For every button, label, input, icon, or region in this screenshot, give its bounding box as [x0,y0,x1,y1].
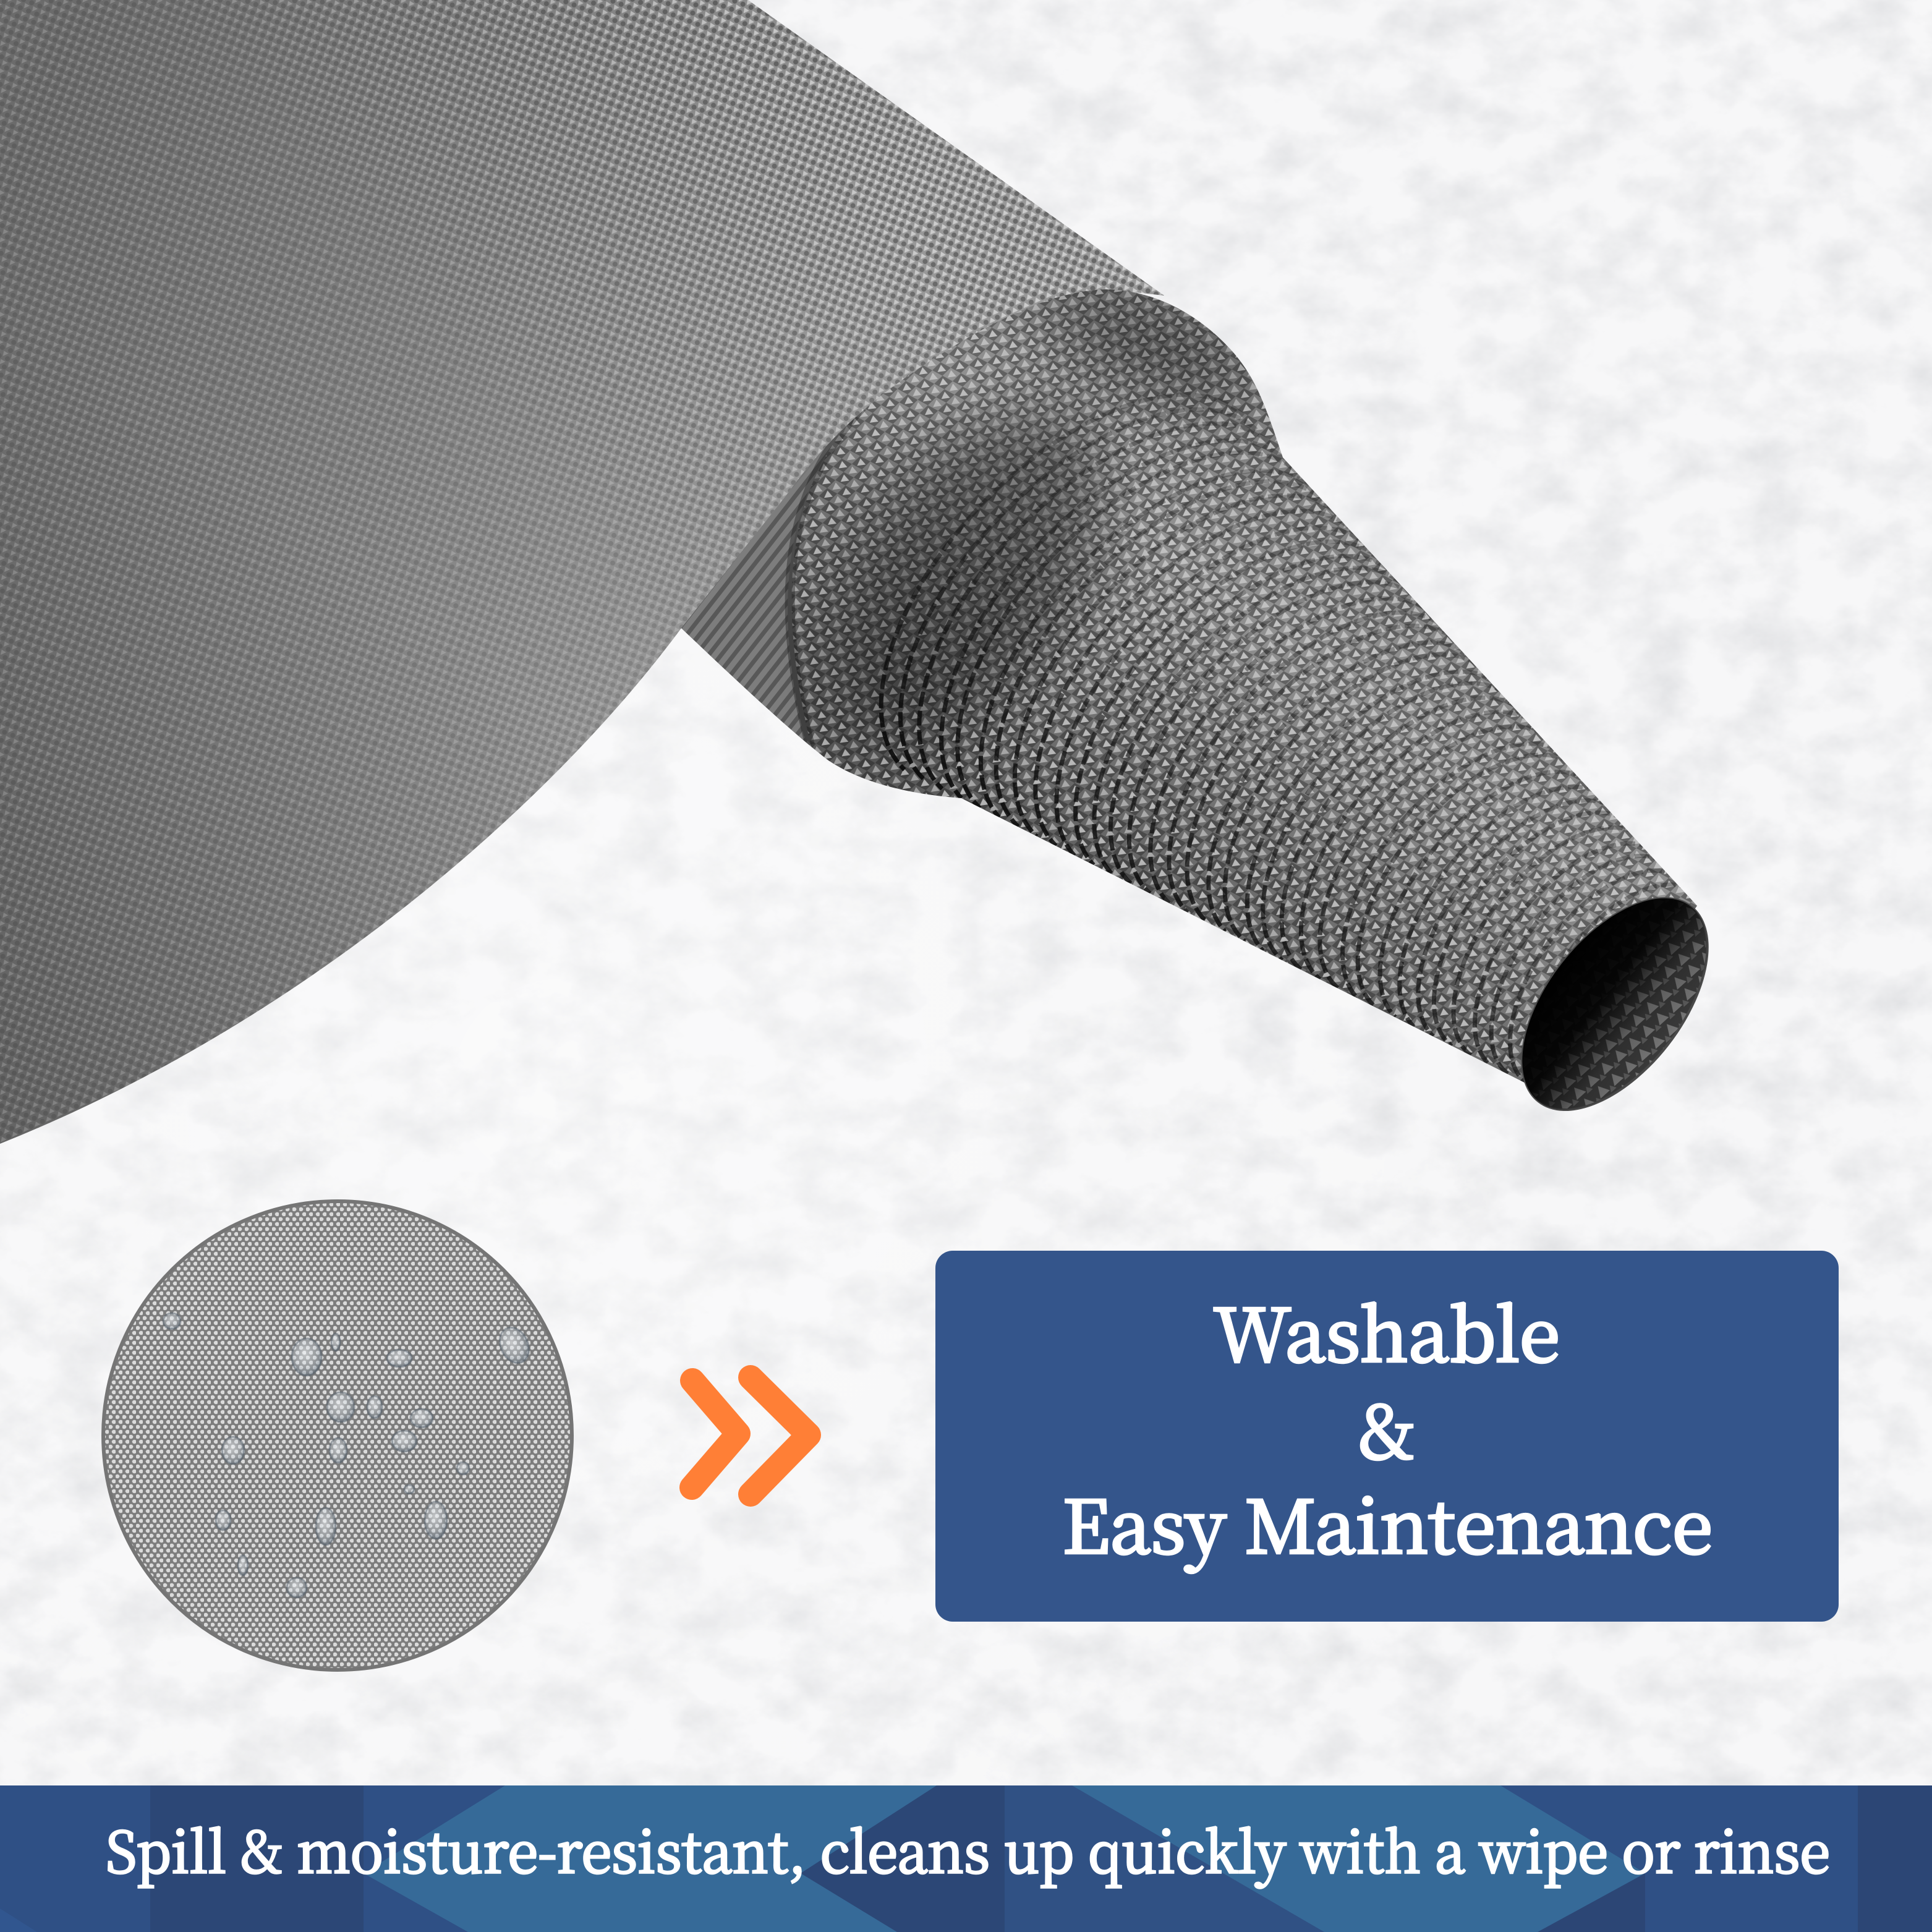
rolled end of mat [681,289,1697,1083]
banner geometric background [0,1785,1932,1932]
roll opening [1486,866,1743,1143]
fold strip [681,446,832,749]
mat sheet [0,0,1164,1144]
callout heading: & [1358,1374,1415,1479]
arrow: orange double chevron [692,1377,809,1494]
callout heading: Easy Maintenance [1062,1469,1713,1574]
callout heading [1062,1277,1713,1574]
coil rings [881,394,1693,1094]
icon: water droplets [163,1313,535,1598]
diamond weave [792,272,1793,1175]
panel: rolled grey mat product [0,0,1793,1175]
callout heading: Washable [1214,1277,1560,1382]
banner text: Spill & moisture-resistant, cleans up quickly with a wipe or rinse [106,1808,1830,1889]
panel: water droplets fabric close-up [103,1201,572,1670]
callout: washable and easy maintenance [935,1251,1839,1622]
fabric circle [103,1201,572,1670]
callout background [935,1251,1839,1622]
panel: bottom banner [0,1785,1932,1932]
